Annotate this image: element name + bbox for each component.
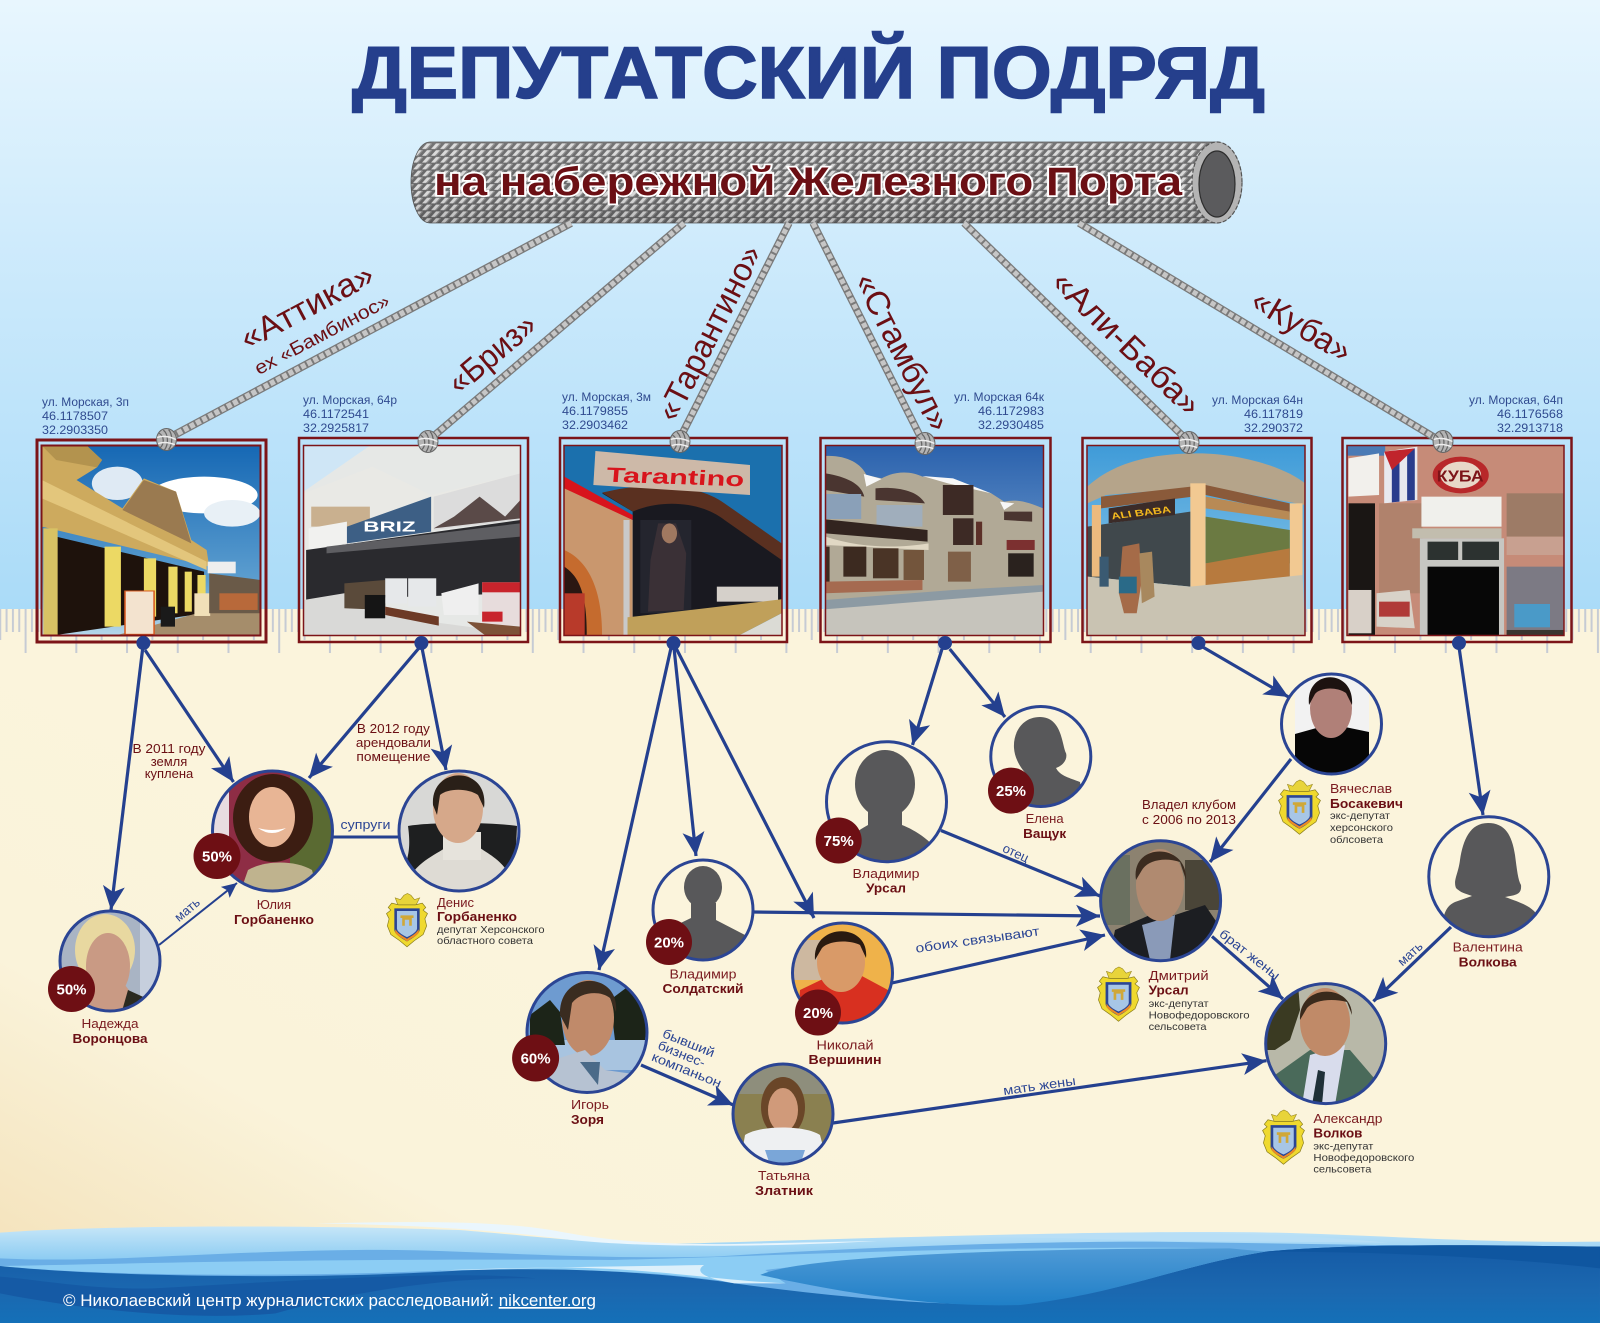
rope label: Тарантино: «Тарантино»: [649, 239, 769, 427]
relation: мать (Воронцова): мать: [171, 894, 203, 924]
arrow: Урсал В to Урсал Д: [941, 830, 1100, 896]
name and position: депутат Херсонского: [437, 924, 545, 936]
frame: Тарантино: [560, 438, 787, 642]
silhouette: [826, 742, 946, 862]
relation: бывший бизнес-компаньон: компаньон: [650, 1049, 724, 1091]
name and position: Вячеслав: [1330, 781, 1392, 796]
copyright: © Николаевский центр журналистских расследований: nikcenter.org: [63, 1291, 596, 1310]
address: Куба: 32.2913718: [1497, 423, 1563, 435]
badge 20%: 20%: [803, 1005, 833, 1022]
relation: мать жены: мать жены: [1002, 1073, 1077, 1098]
relation: бывший бизнес-компаньон: [650, 1026, 724, 1091]
name: Урсал: [866, 881, 906, 896]
arrow: Босакевич to Урсал Д: [1210, 759, 1291, 862]
note: владел клубом: [1142, 797, 1236, 827]
name: Валентина: [1453, 939, 1524, 954]
address: Куба: 46.1176568: [1497, 409, 1563, 421]
name and position: сельсовета: [1149, 1021, 1207, 1033]
photo: Бриз: [304, 446, 520, 635]
name: Татьяна: [758, 1168, 811, 1183]
badge 20%: 20%: [654, 934, 684, 952]
photo: Али-Баба: ALI BABA: [1110, 504, 1172, 522]
pipe body: [411, 142, 1242, 223]
address: Аттика: 46.1178507: [42, 411, 108, 423]
photo: Куба: КУБА: [1437, 469, 1484, 486]
crest: [1263, 1110, 1304, 1164]
address: Аттика: [42, 397, 129, 437]
person: Владимир Солдатский: [646, 860, 753, 996]
person: Николай Вершинин: [792, 923, 893, 1067]
address: Бриз: 32.2925817: [303, 423, 369, 435]
relation: бывший бизнес-компаньон: бизнес-: [656, 1038, 708, 1070]
address: Али-Баба: ул. Морская 64н: [1212, 395, 1303, 407]
address: Тарантино: ул. Морская, 3м: [562, 392, 651, 404]
name and position: Денис: [437, 895, 474, 910]
name: [571, 1097, 609, 1127]
photo: Бриз: BRIZ: [363, 519, 416, 536]
silhouette: [991, 706, 1091, 815]
person: Валентина Волкова: [1429, 817, 1549, 969]
name: [234, 897, 314, 927]
name and position: херсонского: [1330, 822, 1393, 834]
arrow: Зоря to Златник: [641, 1065, 733, 1105]
frame: Куба: [1342, 438, 1572, 642]
name: [662, 966, 744, 996]
address: Стамбул: 46.1172983: [978, 406, 1044, 418]
relation: обоих связывают: обоих связывают: [914, 923, 1040, 956]
address: Али-Баба: 46.117819: [1244, 409, 1303, 421]
portrait: [1282, 674, 1382, 775]
note: владел клубом: с 2006 по 2013: [1142, 812, 1236, 827]
rope to Стамбул: [813, 223, 935, 454]
name: Николай: [816, 1038, 874, 1052]
title: ДЕПУТАТСКИЙ ПОДРЯД: [352, 32, 1265, 114]
person: Александр Волков: [1263, 983, 1415, 1176]
rope label: Бриз: «Бриз»: [440, 306, 543, 401]
rope to Али-Баба: [964, 223, 1199, 453]
rope label: Аттика: «Аттика»: [233, 255, 380, 356]
name: [1453, 939, 1524, 969]
name and position: Новофедоровского: [1149, 1010, 1250, 1022]
name: [1023, 811, 1067, 841]
rope to Куба: [1079, 223, 1453, 452]
rope label: Куба: «Куба»: [1245, 281, 1359, 369]
portrait: [212, 771, 335, 893]
name and position: Горбаненко: [437, 909, 517, 924]
frame: Аттика: [37, 440, 266, 642]
person: Владимир Урсал: [816, 742, 946, 896]
address: Куба: [1469, 395, 1563, 435]
name: Златник: [755, 1183, 814, 1198]
name and position: [437, 895, 545, 947]
arrow: Вершинин to Урсал Д: [892, 935, 1105, 983]
note: арендовали помещение: помещение: [356, 749, 430, 764]
name and position: [1330, 781, 1403, 846]
arrow: Аттика to Горбаненко Ю: [145, 650, 234, 782]
arrow: Златник to Волков: [833, 1061, 1266, 1123]
frame: Али-Баба: [1082, 438, 1312, 642]
ruler ticks along the shore: [0, 609, 1600, 653]
name: Елена: [1026, 811, 1064, 826]
address: Стамбул: 32.2930485: [978, 420, 1044, 432]
rope pipe with subtitle: [411, 142, 1242, 223]
name and position: Александр: [1313, 1111, 1382, 1126]
address: Куба: ул. Морская, 64п: [1469, 395, 1563, 407]
name: Юлия: [257, 897, 291, 912]
portrait: [1100, 840, 1222, 965]
name: [852, 866, 920, 896]
rope to Аттика: [157, 223, 571, 450]
arrow: Куба to Волкова: [1459, 647, 1483, 815]
arrow: Али-Баба to Босакевич: [1201, 646, 1288, 697]
relation: отец: отец: [1000, 840, 1032, 866]
name: [808, 1038, 882, 1067]
arrow: Солдатский to Урсал Д: [753, 912, 1100, 916]
arrow: Аттика to Воронцова: [111, 646, 143, 910]
address: Тарантино: 46.1179855: [562, 406, 628, 418]
photo: Стамбул: [826, 446, 1043, 635]
name: Горбаненко: [234, 912, 314, 927]
line: супруги: [332, 836, 398, 838]
address: Аттика: ул. Морская, 3п: [42, 397, 129, 409]
connector dots under photos: [136, 636, 1466, 650]
name: Солдатский: [662, 981, 744, 996]
name and position: сельсовета: [1313, 1164, 1372, 1176]
relation: брат жены: брат жены: [1216, 926, 1283, 983]
note: владел клубом: Владел клубом: [1142, 797, 1236, 812]
arrow: Стамбул to Урсал В: [912, 649, 942, 745]
rope label: Стамбул: «Стамбул»: [848, 267, 959, 437]
silhouette: [653, 860, 753, 970]
pipe shading: [411, 142, 1216, 223]
name: Владимир: [670, 966, 736, 982]
arrow: Урсал Д to Волков: [1212, 936, 1283, 999]
photo: Тарантино: [564, 446, 782, 635]
relation: мать (Волкова): мать: [1394, 938, 1426, 969]
subtitle: на набережной Железного Порта: [434, 160, 1183, 204]
name and position: областного совета: [437, 935, 533, 947]
address: Тарантино: [562, 392, 651, 432]
arrow: Бриз to Горбаненко Д: [422, 648, 446, 770]
person: Дмитрий Урсал: [1098, 840, 1250, 1033]
name and position: Босакевич: [1330, 796, 1403, 811]
name and position: [1313, 1111, 1415, 1176]
name: Надежда: [82, 1016, 139, 1031]
name and position: Дмитрий: [1149, 968, 1209, 983]
address: Бриз: ул. Морская, 64р: [303, 395, 397, 407]
note: арендовали помещение: [356, 721, 431, 764]
crest: [1098, 967, 1139, 1021]
portrait: [399, 771, 519, 895]
badge 50%: 50%: [56, 982, 87, 998]
badge 60%: 60%: [521, 1050, 551, 1068]
arrow: Тарантино to Солдатский: [674, 648, 696, 856]
name: [72, 1016, 148, 1046]
note: земля куплена: земля: [151, 754, 187, 769]
silhouette: [1429, 817, 1549, 945]
address: Стамбул: [954, 392, 1045, 432]
name: [755, 1168, 814, 1198]
badge 60%: [512, 1034, 559, 1082]
relation: бывший бизнес-компаньон: бывший: [660, 1026, 717, 1060]
frame: Стамбул: [820, 438, 1050, 642]
name and position: Новофедоровского: [1313, 1152, 1415, 1164]
address: Аттика: 32.2903350: [42, 425, 108, 437]
crest: [386, 894, 428, 947]
note: арендовали помещение: арендовали: [356, 735, 431, 750]
person: Денис Горбаненко: [386, 771, 545, 947]
person: Юлия Горбаненко: [194, 771, 335, 927]
name and position: экс-депутат: [1149, 998, 1209, 1010]
photo: Аттика: [42, 446, 260, 635]
arrow: Тарантино to Зоря: [599, 648, 671, 970]
badge 75%: 75%: [824, 833, 854, 850]
frame: Бриз: [299, 438, 528, 642]
photo: Али-Баба: [1087, 446, 1305, 635]
note: земля куплена: [132, 741, 206, 781]
crest: [1279, 780, 1320, 834]
name: Игорь: [571, 1097, 609, 1112]
address: Стамбул: ул. Морская 64к: [954, 392, 1045, 404]
pipe end: [1192, 142, 1242, 223]
address: Тарантино: 32.2903462: [562, 420, 628, 432]
address: Бриз: [303, 395, 397, 435]
name: Воронцова: [72, 1031, 148, 1046]
name: Ващук: [1023, 826, 1067, 841]
badge 50%: [194, 833, 240, 879]
address: Бриз: 46.1172541: [303, 409, 369, 421]
portrait: [527, 972, 650, 1094]
rope label: Али-Баба: «Али-Баба»: [1045, 263, 1209, 423]
pipe opening: [1199, 151, 1235, 217]
note: арендовали помещение: В 2012 году: [357, 721, 430, 736]
portrait: [733, 1064, 833, 1165]
name and position: Урсал: [1149, 983, 1189, 998]
portrait: [1265, 983, 1387, 1105]
badge 25%: 25%: [996, 783, 1026, 800]
photo: Тарантино: Tarantino: [606, 463, 745, 491]
badge 50%: 50%: [202, 848, 232, 866]
person: Татьяна Златник: [733, 1064, 833, 1198]
badge 75%: [816, 818, 862, 864]
badge 20%: [795, 990, 841, 1036]
name and position: Волков: [1313, 1126, 1362, 1140]
sea waves: [0, 1222, 1600, 1323]
arrow: Бриз to Горбаненко Ю: [309, 648, 419, 778]
photo: Куба: [1347, 446, 1564, 635]
rope to Бриз: [418, 223, 684, 452]
arrow: Воронцова to Горбаненко Ю: [159, 883, 237, 945]
person: Вячеслав Босакевич: [1279, 674, 1403, 846]
background: sky: [0, 0, 1600, 610]
name: Владимир: [852, 866, 920, 881]
address: Али-Баба: [1212, 395, 1303, 435]
name: Зоря: [571, 1112, 604, 1127]
arrow: Стамбул to Ващук: [950, 649, 1005, 717]
note: земля куплена: В 2011 году: [132, 741, 206, 756]
note: земля куплена: куплена: [145, 766, 194, 781]
arrow: Волкова to Волков: [1373, 927, 1451, 1001]
portrait: [792, 923, 893, 1023]
name and position: облсовета: [1330, 834, 1383, 846]
name: Волкова: [1459, 954, 1518, 969]
rope label: ех Бамбинос: ех «Бамбинос»: [251, 291, 394, 380]
portrait: [60, 911, 160, 1011]
name and position: [1149, 968, 1250, 1033]
background: sand: [0, 609, 1600, 1323]
person: Игорь Зоря: [512, 972, 650, 1127]
relation: супруги: супруги: [340, 817, 390, 832]
rope to Тарантино: [670, 223, 789, 452]
arrow: Тарантино to Вершинин: [676, 648, 814, 918]
name: Вершинин: [808, 1052, 882, 1067]
name and position: экс-депутат: [1330, 810, 1390, 822]
person: Елена Ващук: [988, 706, 1091, 841]
address: Али-Баба: 32.290372: [1244, 423, 1303, 435]
name and position: экс-депутат: [1313, 1140, 1374, 1152]
person: Надежда Воронцова: [48, 911, 160, 1046]
